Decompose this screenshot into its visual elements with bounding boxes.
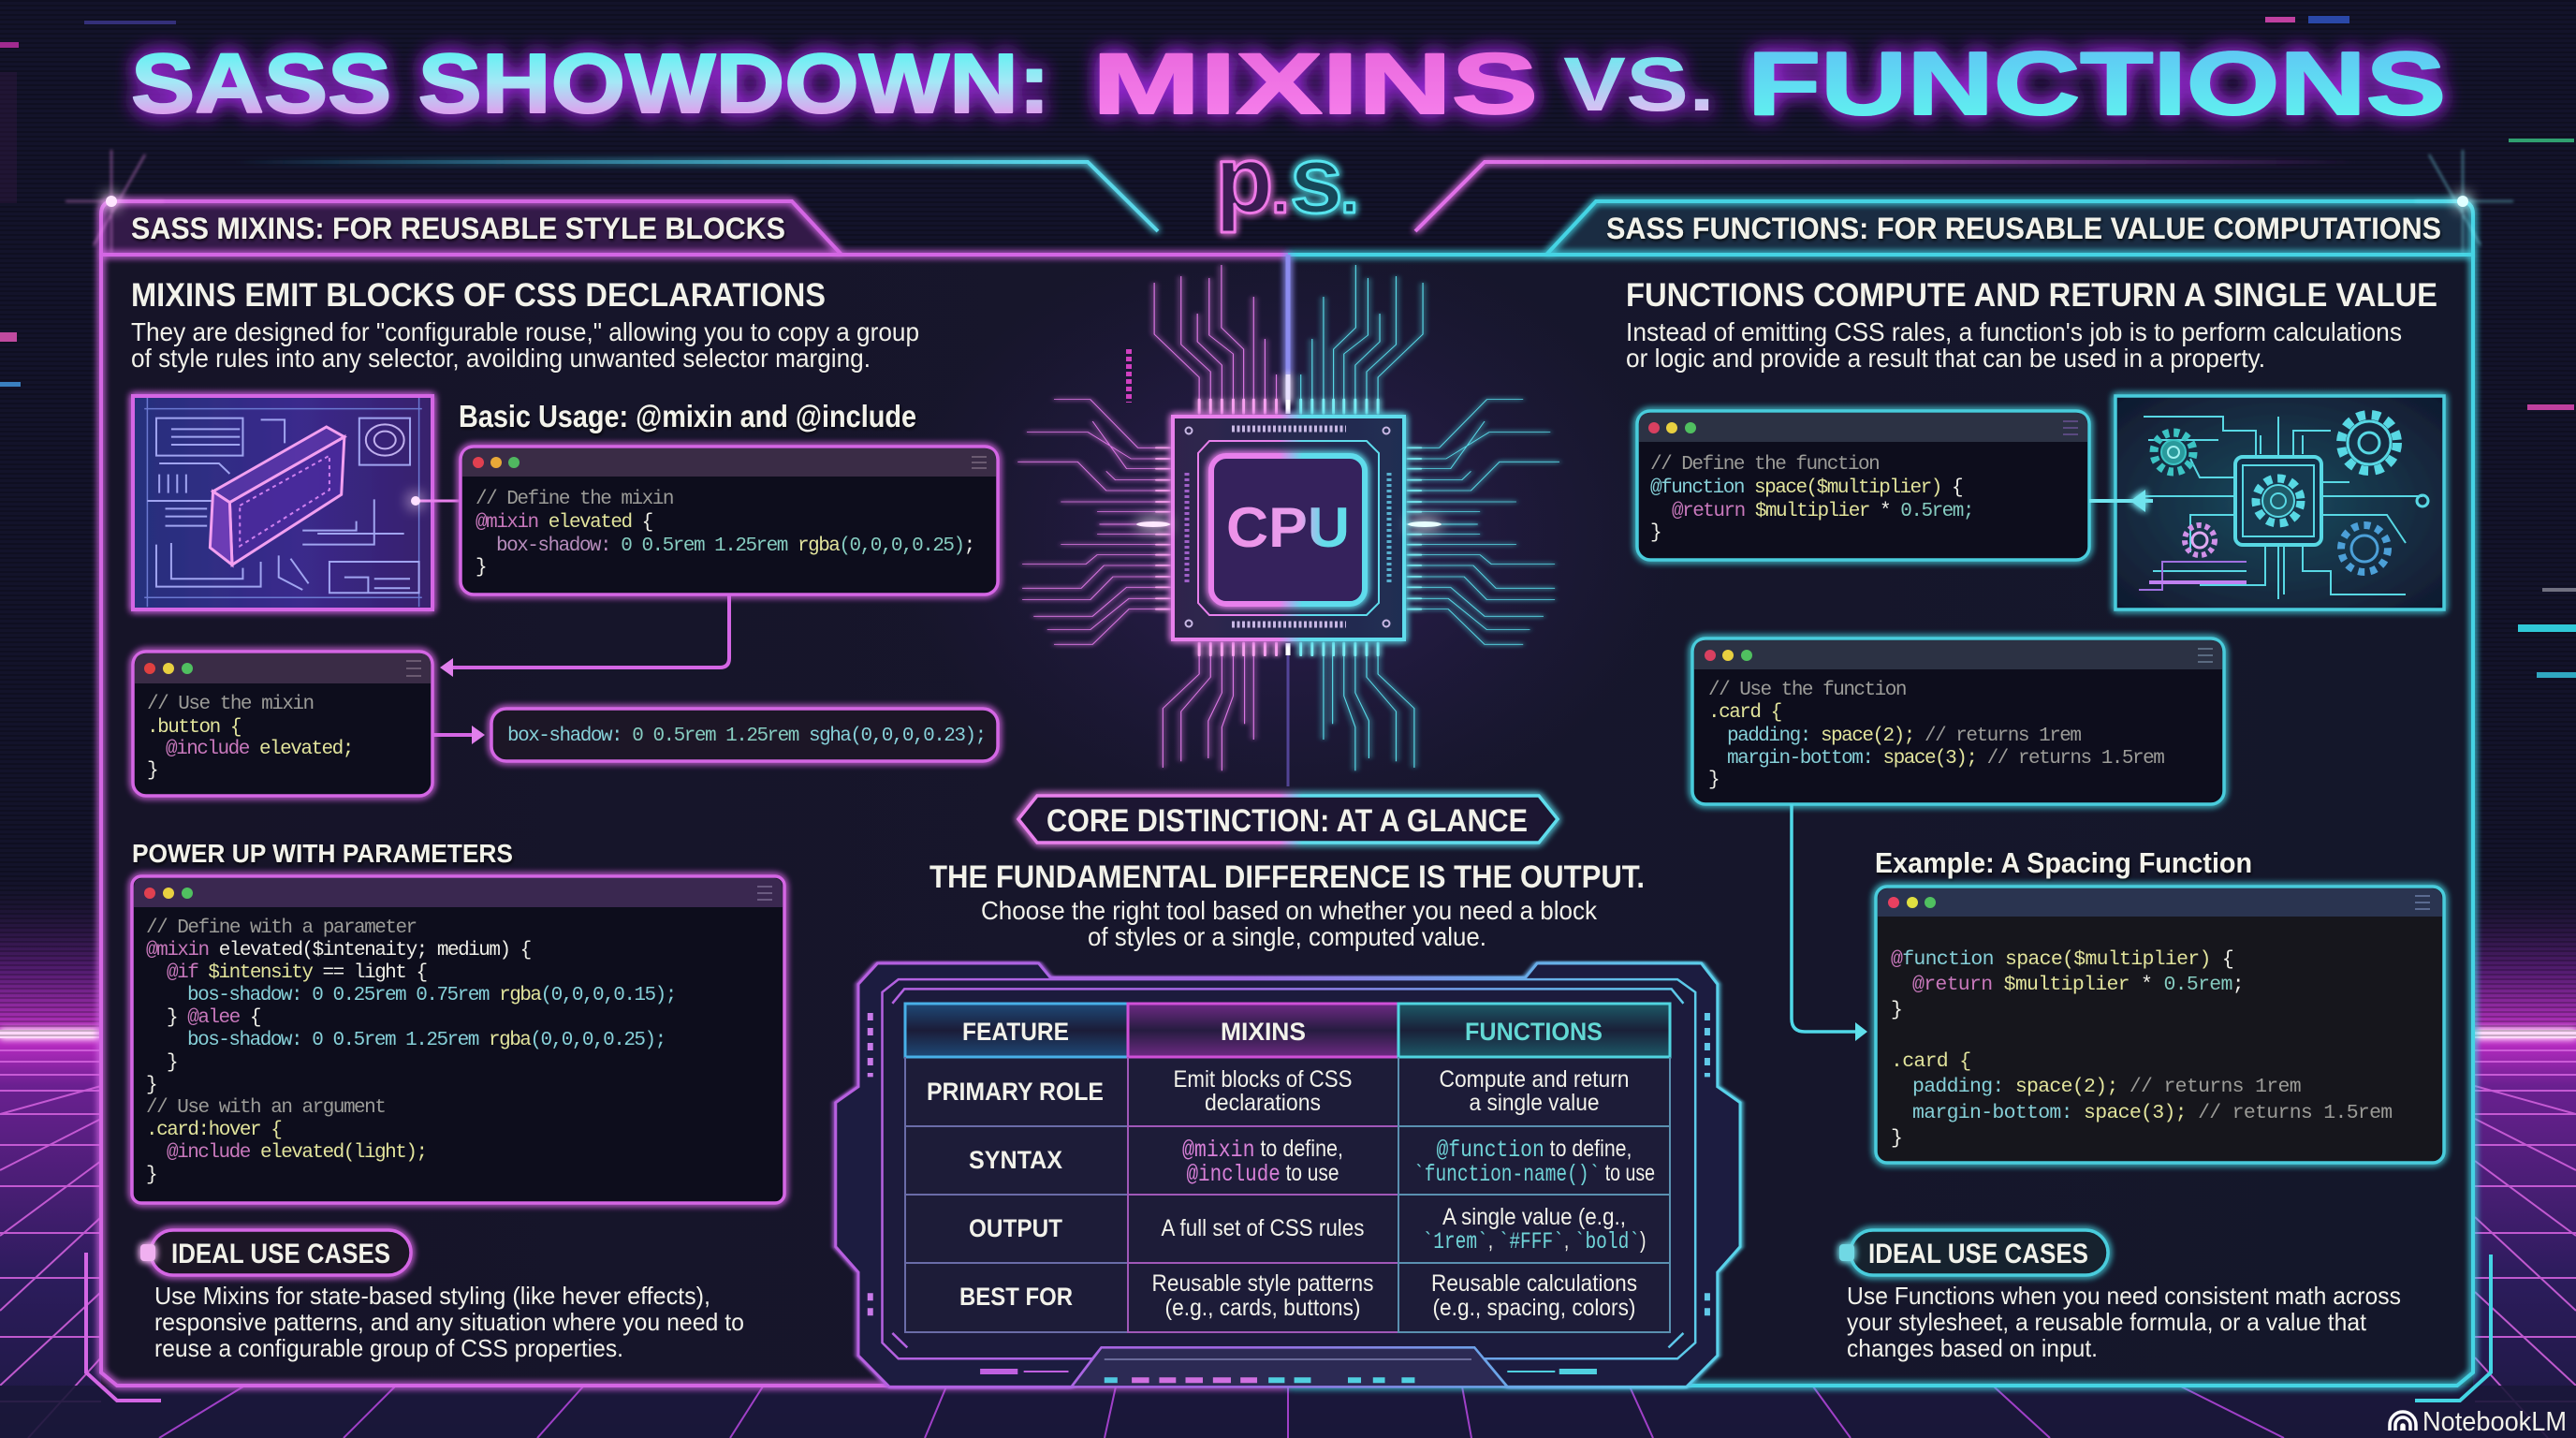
code window: parameters: } @alee {: [167, 1007, 260, 1029]
decorative top rails: [234, 162, 2355, 231]
glow behind CPU: [895, 234, 1681, 833]
connector: code to gears: [2089, 490, 2153, 512]
header cell: functions: FUNCTIONS: [1465, 1018, 1603, 1046]
text block: functions use cases: [1847, 1282, 2401, 1362]
row: syntax: @function to define,: [1436, 1136, 1632, 1164]
logo: p.s.: .: [1340, 154, 1358, 227]
code window: use mixin: @include elevated;: [166, 739, 353, 760]
code window: use function: .card {: [1708, 702, 1781, 724]
connector: image to mixin code: [411, 496, 461, 506]
header cell: feature: [905, 1004, 1128, 1057]
row: syntax: @mixin to define,: [1182, 1136, 1343, 1164]
cpu chip: CPU: [1226, 496, 1350, 559]
text block: mixins intro: [131, 277, 919, 373]
code window: spacing example: .card {: [1891, 1050, 1970, 1073]
code window: spacing example: @function space($multiplier) {: [1891, 948, 2233, 971]
code window: spacing example: margin-bottom: space(3); // returns 1.5rem: [1912, 1102, 2393, 1124]
code window: define function: }: [1650, 522, 1661, 544]
title: [131, 34, 2446, 134]
code window: use function: margin-bottom: space(3); // returns 1.5rem: [1727, 748, 2164, 770]
text block: core distinction: Choose the right tool based on whether you need a block: [981, 896, 1598, 925]
row: primary role: declarations: [1205, 1090, 1321, 1116]
badge: core distinction: CORE DISTINCTION: AT A GLANCE: [1046, 803, 1528, 839]
text block: mixins intro: of style rules into any selector, avoilding unwanted selector marging.: [131, 344, 871, 373]
text block: functions use cases: changes based on input.: [1847, 1334, 2098, 1362]
code window: parameters: bos-shadow: 0 0.5rem 1.25rem rgba(0,0,0,0.25);: [187, 1030, 666, 1051]
code window: spacing example: }: [1891, 999, 1902, 1021]
code window: use function: }: [1708, 770, 1719, 791]
text block: core distinction: [929, 859, 1645, 951]
header cell: feature: FEATURE: [962, 1018, 1069, 1046]
code window: define mixin: @mixin elevated {: [476, 512, 652, 534]
code window: spacing example: }: [1891, 1127, 1902, 1150]
panel: mixins frame: [66, 150, 1288, 1401]
logo: p.s.: p: [1215, 126, 1273, 233]
row: output: `1rem`, `#FFF`, `bold`): [1423, 1227, 1646, 1255]
code window: parameters: }: [167, 1052, 177, 1074]
logo: p.s.: [1215, 126, 1358, 233]
code window: define mixin: box-shadow: 0 0.5rem 1.25rem rgba(0,0,0,0.25);: [496, 536, 974, 557]
illustration: blueprint block: [133, 396, 432, 609]
code window: define mixin: }: [476, 557, 486, 579]
code window: parameters: .card:hover {: [146, 1120, 281, 1141]
panel: functions frame: [1288, 150, 2513, 1401]
text block: mixins use cases: Use Mixins for state-based styling (like hever effects),: [154, 1282, 710, 1310]
code window: use function: padding: space(2); // returns 1rem: [1727, 726, 2081, 747]
text block: mixins use cases: reuse a configurable group of CSS properties.: [154, 1334, 623, 1362]
header cell: mixins: MIXINS: [1221, 1018, 1306, 1046]
header cell: functions: [1398, 1004, 1670, 1057]
traces: left pink: [1017, 265, 1277, 770]
code window: parameters: @mixin elevated($intenaity; medium) {: [146, 940, 531, 961]
row: best for: (e.g., cards, buttons): [1164, 1295, 1361, 1321]
badge: ideal use cases (functions): IDEAL USE CASES: [1868, 1239, 2088, 1269]
text block: functions intro: Instead of emitting CSS rales, a function's job is to perform calculations: [1626, 317, 2402, 346]
comparison table frame: [836, 963, 1740, 1387]
title: FUNCTIONS: [1748, 34, 2446, 134]
badge: ideal use cases (mixins): IDEAL USE CASES: [171, 1239, 390, 1269]
code window: define mixin: // Define the mixin: [476, 489, 673, 510]
row: syntax: [969, 1136, 1655, 1188]
text block: core distinction: THE FUNDAMENTAL DIFFERENCE IS THE OUTPUT.: [929, 859, 1645, 895]
row: syntax: SYNTAX: [969, 1146, 1062, 1174]
code window: parameters: @if $intensity == light {: [167, 962, 427, 984]
row: primary role: a single value: [1470, 1090, 1599, 1116]
text block: mixins intro: They are designed for "configurable rouse," allowing you to copy a group: [131, 317, 919, 346]
text block: mixins intro: MIXINS EMIT BLOCKS OF CSS DECLARATIONS: [131, 277, 826, 314]
arrow: mixin to output: [432, 726, 485, 744]
centre vertical beam: [1286, 255, 1290, 786]
code window: define function: @function space($multiplier) {: [1650, 477, 1962, 499]
code window: parameters: }: [146, 1075, 156, 1096]
text block: mixins use cases: [154, 1282, 744, 1362]
row: primary role: Compute and return: [1440, 1066, 1629, 1093]
row: syntax: `function-name()` to use: [1413, 1160, 1655, 1188]
heading: power up: POWER UP WITH PARAMETERS: [132, 839, 513, 868]
code window: spacing example: [1876, 887, 2444, 1163]
badge: ideal use cases (mixins): [140, 1230, 411, 1275]
arrow: define to use mixin: [440, 594, 729, 677]
row: best for: Reusable style patterns: [1151, 1270, 1374, 1297]
header: mixins: SASS MIXINS: FOR REUSABLE STYLE BLOCKS: [131, 212, 785, 245]
code window: define function: @return $multiplier * 0.5rem;: [1672, 501, 1973, 522]
row: primary role: PRIMARY ROLE: [927, 1078, 1104, 1106]
badge: ideal use cases (functions): [1839, 1230, 2108, 1275]
code window: define mixin: [461, 447, 998, 594]
output box: compiled css: [491, 709, 998, 761]
code window: parameters: }: [146, 1165, 156, 1186]
text block: functions use cases: Use Functions when you need consistent math across: [1847, 1282, 2401, 1310]
logo: p.s.: .: [1271, 154, 1289, 227]
row: primary role: Emit blocks of CSS: [1174, 1066, 1352, 1093]
code window: spacing example: padding: space(2); // returns 1rem: [1912, 1076, 2301, 1098]
row: best for: [959, 1270, 1637, 1321]
comparison table: [905, 1004, 1670, 1332]
row: primary role: [927, 1066, 1629, 1116]
NotebookLM mark: NotebookLM: [2422, 1407, 2567, 1437]
title: VS.: [1563, 42, 1715, 127]
title: SASS SHOWDOWN:: [131, 37, 1050, 131]
traces: right cyan: [1301, 265, 1559, 770]
code window: use function: // Use the function: [1708, 680, 1906, 701]
code window: use mixin: }: [147, 760, 157, 782]
code window: use mixin: [133, 652, 432, 796]
logo: p.s.: s: [1290, 126, 1343, 233]
code window: use mixin: // Use the mixin: [147, 694, 314, 715]
header: functions: SASS FUNCTIONS: FOR REUSABLE VALUE COMPUTATIONS: [1606, 212, 2441, 245]
output box: compiled css: box-shadow: 0 0.5rem 1.25rem sgha(0,0,0,0.23);: [507, 726, 986, 747]
code window: parameters: // Define with a parameter: [146, 917, 417, 939]
row: best for: (e.g., spacing, colors): [1432, 1295, 1636, 1321]
text block: functions use cases: your stylesheet, a reusable formula, or a value that: [1847, 1308, 2367, 1336]
code window: parameters: [132, 876, 784, 1203]
row: best for: Reusable calculations: [1431, 1270, 1637, 1297]
title: MIXINS: [1092, 37, 1538, 132]
arrow: use function to example: [1792, 804, 1867, 1041]
text block: functions intro: [1626, 277, 2437, 373]
text block: functions intro: FUNCTIONS COMPUTE AND RETURN A SINGLE VALUE: [1626, 277, 2437, 314]
subheading: example: Example: A Spacing Function: [1875, 846, 2252, 879]
badge: core distinction: [1018, 796, 1558, 843]
row: output: A full set of CSS rules: [1161, 1215, 1365, 1241]
text block: core distinction: of styles or a single, computed value.: [1088, 922, 1486, 951]
row: output: OUTPUT: [969, 1214, 1062, 1242]
code window: parameters: // Use with an argument: [146, 1097, 385, 1119]
code window: parameters: @include elevated(light);: [167, 1142, 427, 1164]
illustration: gears and chip: [2115, 396, 2444, 609]
code window: use function: [1692, 638, 2224, 804]
row: output: [969, 1204, 1646, 1255]
cpu chip: [1017, 265, 1559, 770]
header cell: mixins: [1128, 1004, 1398, 1057]
main panel background: [101, 255, 2473, 1386]
code window: define function: // Define the function: [1650, 454, 1879, 476]
row: output: A single value (e.g.,: [1442, 1204, 1626, 1230]
margin data dashes: [0, 16, 2576, 678]
code window: parameters: bos-shadow: 0 0.25rem 0.75rem rgba(0,0,0,0.15);: [187, 985, 676, 1006]
code window: use mixin: .button {: [147, 717, 241, 739]
row: syntax: @include to use: [1187, 1160, 1339, 1188]
subheading: basic usage: Basic Usage: @mixin and @include: [459, 399, 916, 433]
text block: functions intro: or logic and provide a result that can be used in a property.: [1626, 344, 2265, 373]
row: best for: BEST FOR: [959, 1283, 1073, 1311]
code window: spacing example: @return $multiplier * 0.5rem;: [1912, 974, 2244, 996]
text block: mixins use cases: responsive patterns, and any situation where you need to: [154, 1308, 744, 1336]
code window: define function: [1637, 411, 2089, 560]
